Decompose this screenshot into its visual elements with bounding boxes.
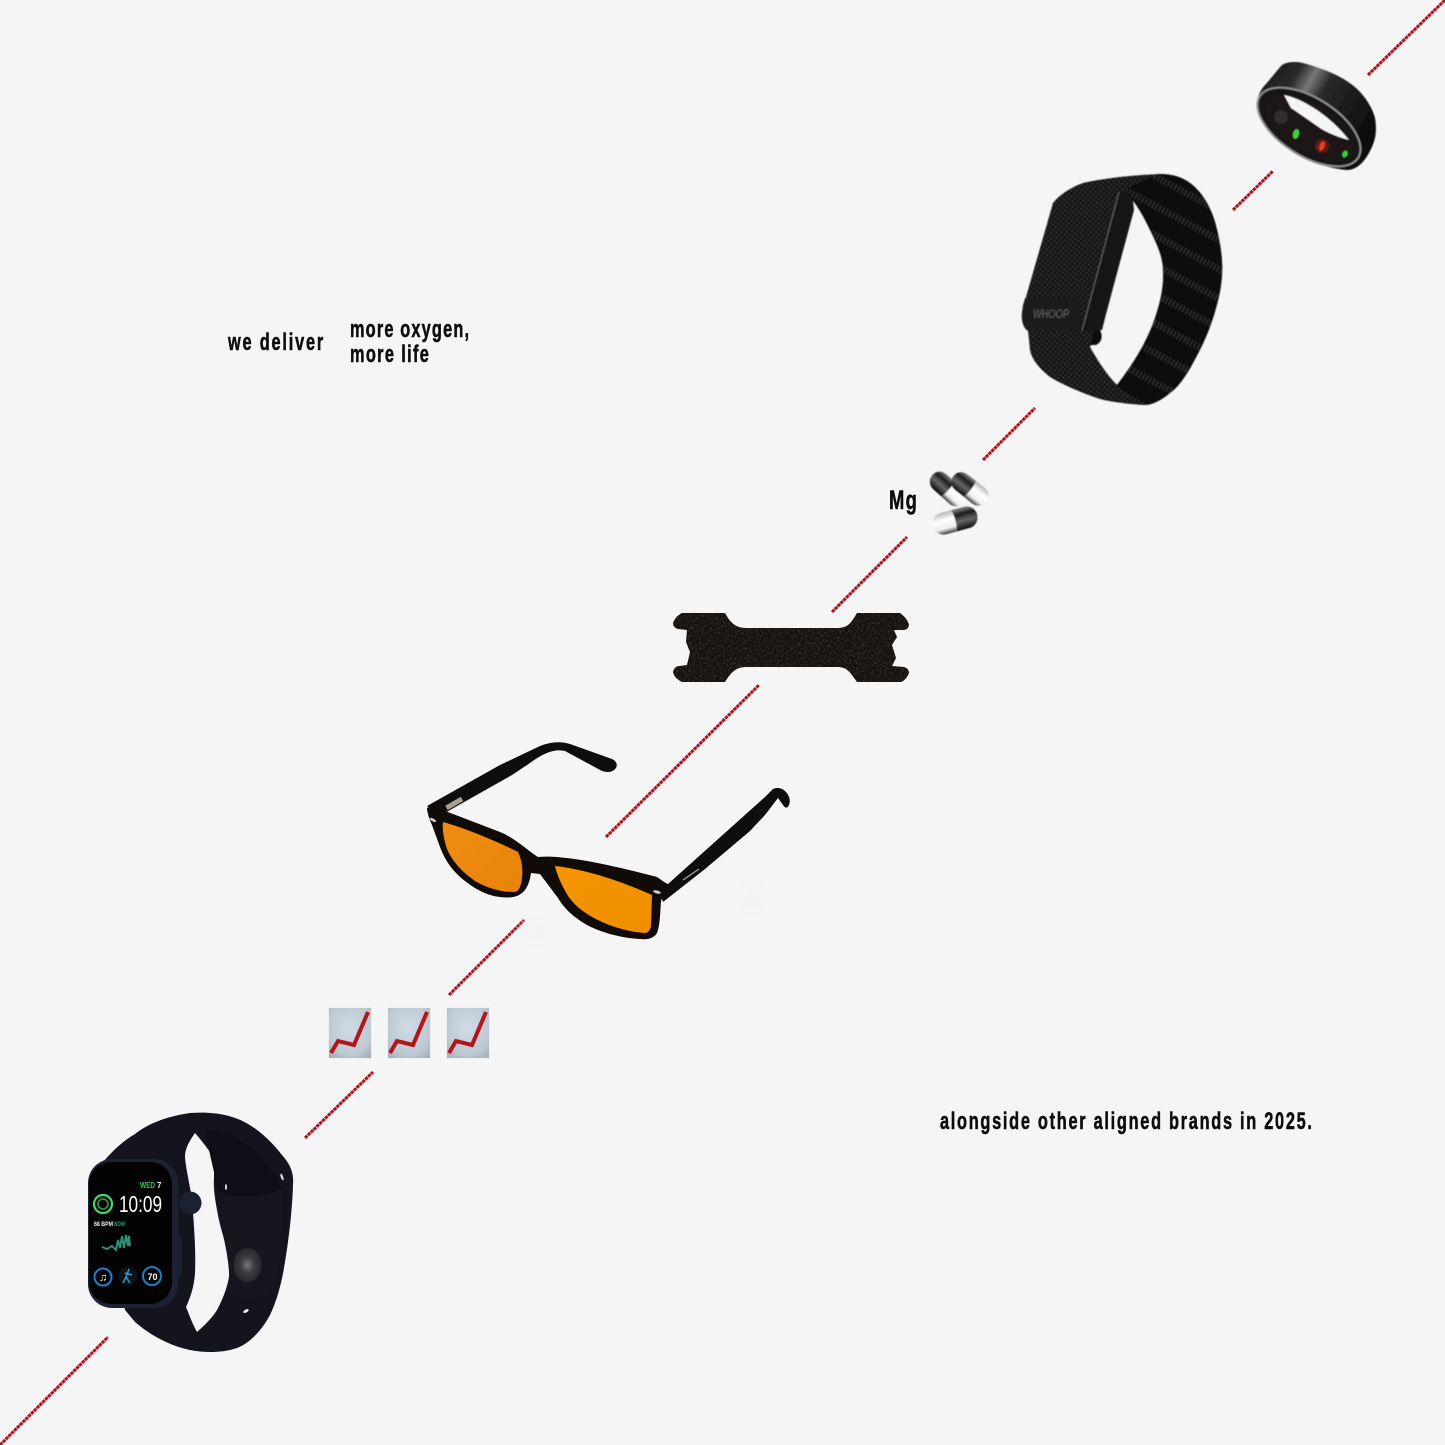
icon: magnesium capsules [926,468,993,537]
icon: orange-lens glasses [427,742,790,944]
label: Mg: Mg [889,484,917,515]
screen contents: 10:09 [119,1191,162,1217]
icon: black nasal strip [673,613,909,682]
watch band [103,1113,293,1352]
screen contents: NOW [114,1222,125,1228]
text: more oxygen, more life: more oxygen, [350,316,469,343]
screen contents: ♫ [99,1272,107,1284]
screen contents: 7 [157,1181,162,1190]
watch screen [89,1162,172,1304]
left lens [443,822,522,892]
chart 1 [328,1008,372,1058]
metal pin [234,1248,262,1282]
right temple [655,788,790,902]
screen contents: 68 BPM [94,1222,113,1228]
icon: WHOOP fitness band: WHOOP [1033,307,1069,321]
screen contents [94,1181,162,1286]
icon: smart ring [1244,62,1376,182]
front frame [427,807,667,939]
watch case [88,1159,178,1308]
chart 2 [388,1008,430,1058]
text: more oxygen, more life [350,316,469,368]
icon: three rising charts [328,1008,490,1058]
left temple [427,742,617,816]
text: more oxygen, more life: more life [350,341,429,368]
chart 3 [446,1008,490,1058]
faint product shadows [527,884,762,944]
text: alongside other aligned brands in 2025: alongside other aligned brands in 2025. [940,1108,1312,1135]
screen contents: WED [140,1181,155,1190]
icon: WHOOP fitness band [1022,174,1222,405]
icon: smartwatch [88,1113,293,1352]
right lens [555,866,652,933]
text: we deliver: we deliver [227,329,323,356]
digital crown [178,1192,202,1214]
screen contents: 70 [148,1272,158,1282]
